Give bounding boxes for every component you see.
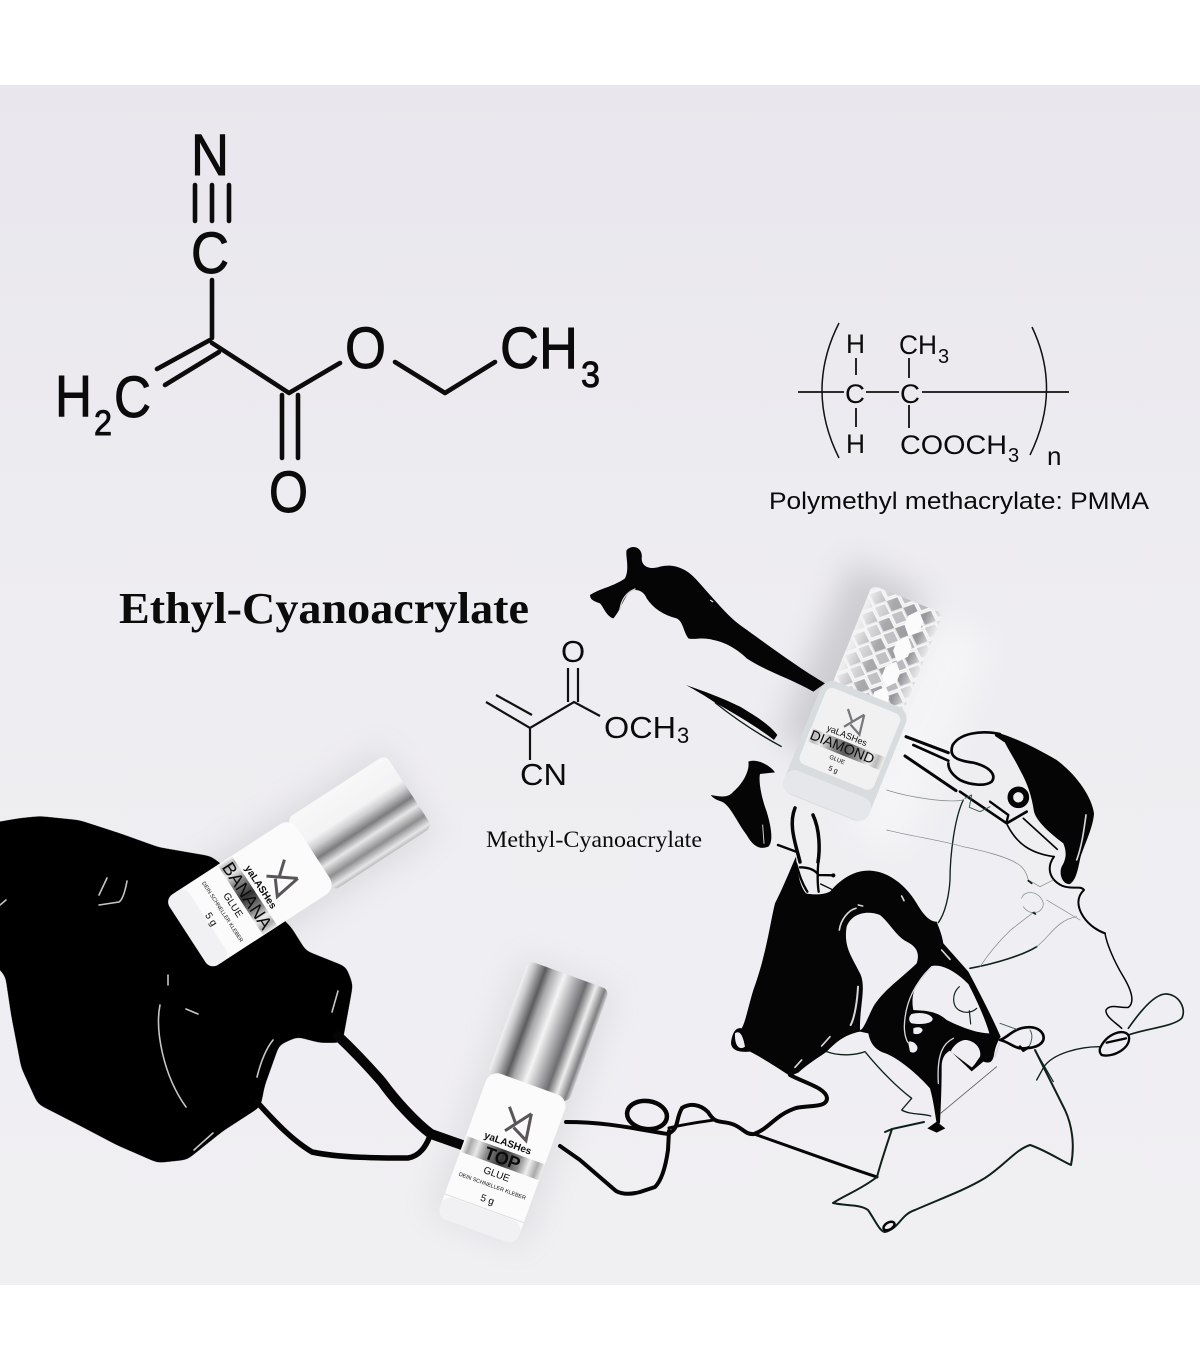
bottle: Top glue <box>436 961 609 1246</box>
bottle: Top glue: TOP <box>482 1143 523 1174</box>
structural formula: PMMA <box>798 323 1069 471</box>
structural formula: PMMA: CH <box>899 330 937 360</box>
glue spill: top-right blob and network <box>887 732 1183 1082</box>
structural formula: PMMA: H <box>846 429 865 459</box>
blob highlights <box>795 896 999 1083</box>
bottle: Banana glue: BANANA <box>218 859 276 933</box>
bottle: Diamond glue: GLUE <box>828 755 846 766</box>
bottle: Banana glue: 5 g <box>202 911 219 928</box>
blob top strands and loop <box>796 860 835 892</box>
structural formula: PMMA: C <box>900 379 920 409</box>
glue spill: main blob at right <box>731 857 1001 1133</box>
glue strands: thread network <box>560 808 1073 1232</box>
bottle: Banana glue: DEIN SCHNELLER KLEBER <box>200 881 244 944</box>
soft shadows under bottles <box>155 562 992 1246</box>
caption: Polymethyl methacrylate: Polymethyl methacrylate: PMMA <box>769 488 1149 515</box>
structural formula: methyl-cyanoacrylate: OCH <box>604 710 676 745</box>
bottle: Diamond glue: DIAMOND <box>808 726 877 767</box>
structural formula: PMMA: C <box>845 379 865 409</box>
glue highlights <box>0 878 338 1150</box>
logo <box>263 859 300 896</box>
heading: Ethyl-Cyanoacrylate: Ethyl-Cyanoacrylate <box>119 584 529 633</box>
bottle: Top glue: DEIN SCHNELLER KLEBER <box>458 1172 526 1202</box>
structural formula: PMMA: H <box>846 329 865 359</box>
glue drip <box>927 1122 945 1133</box>
structural formula: methyl-cyanoacrylate: CN <box>520 757 567 792</box>
logo <box>841 708 867 735</box>
blob inner thin threads <box>827 987 997 1116</box>
structural formula: ethyl-cyanoacrylate: C <box>114 365 151 430</box>
structural formula: methyl-cyanoacrylate <box>486 634 689 792</box>
structural formula: ethyl-cyanoacrylate: 2 <box>94 404 112 443</box>
structural formula: ethyl-cyanoacrylate: H <box>55 364 92 429</box>
structural formula: ethyl-cyanoacrylate: 3 <box>581 354 600 395</box>
structural formula: ethyl-cyanoacrylate: O <box>345 316 386 381</box>
bottle: Diamond glue: yaLASHes <box>825 723 869 748</box>
structural formula: PMMA: 3 <box>1008 445 1019 467</box>
structural formula: methyl-cyanoacrylate: 3 <box>677 723 689 748</box>
caption: Methyl-Cyanoacrylate: Methyl-Cyanoacrylate <box>486 827 702 852</box>
bottle: Diamond glue <box>780 582 949 825</box>
bottle: Diamond glue: 5 g <box>827 765 839 775</box>
glue spill: streaks beside diamond bottle <box>590 547 825 848</box>
structural formula: ethyl-cyanoacrylate: O <box>269 460 308 525</box>
glue spill: large black puddle at left <box>0 819 465 1160</box>
bottle: Banana glue: GLUE <box>220 891 245 920</box>
structural formula: ethyl-cyanoacrylate: CH <box>500 316 578 381</box>
bottle: Banana glue <box>164 755 432 971</box>
bottle: Top glue: GLUE <box>482 1165 511 1185</box>
structural formula: ethyl-cyanoacrylate: N <box>191 123 229 188</box>
structural formula: PMMA: n <box>1047 441 1061 471</box>
logo <box>501 1106 535 1140</box>
structural formula: methyl-cyanoacrylate: O <box>561 634 585 669</box>
structural formula: PMMA: COOCH <box>900 430 1007 460</box>
structural formula: PMMA: 3 <box>938 346 949 368</box>
structural formula: ethyl-cyanoacrylate <box>55 123 600 525</box>
bottle: Banana glue: yaLASHes <box>242 864 278 912</box>
bottle: Top glue: yaLASHes <box>483 1130 533 1158</box>
structural formula: ethyl-cyanoacrylate: C <box>191 221 229 286</box>
bottle: Top glue: 5 g <box>479 1193 496 1208</box>
puddle threads <box>257 1036 465 1158</box>
